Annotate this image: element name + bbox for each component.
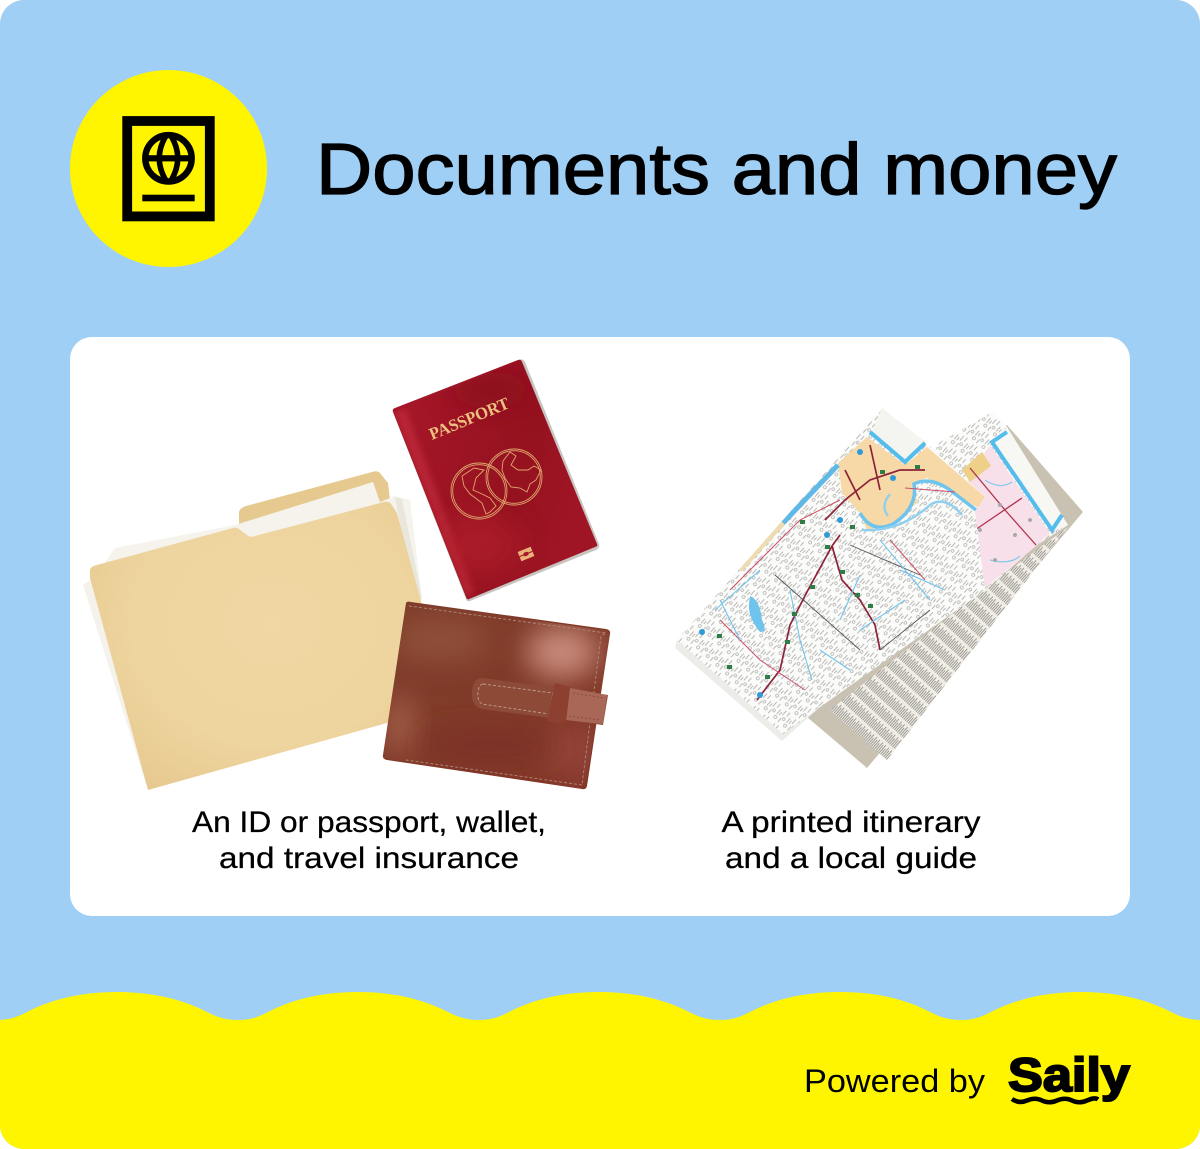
caption: left line two: and travel insurance	[219, 842, 519, 875]
title: Documents and money	[316, 129, 1118, 210]
map orange region	[838, 437, 985, 530]
upper left edge stripe	[783, 465, 838, 523]
caption: right: A printed itinerary	[722, 806, 980, 839]
caption: left: An ID or passport, wallet,	[192, 806, 546, 839]
icon: passport in yellow circle	[70, 70, 267, 267]
map backing board	[807, 425, 1083, 768]
wallet strap	[472, 678, 608, 725]
printed index page	[830, 527, 1068, 760]
powered by label: Powered by	[804, 1063, 986, 1099]
lake	[749, 596, 765, 632]
image: red passport	[393, 359, 599, 601]
map front sheet	[675, 408, 985, 741]
yellow wavy footer band	[0, 992, 1200, 1149]
logo: Saily: Saily	[1008, 1048, 1130, 1101]
passport label: PASSPORT	[426, 393, 513, 444]
panel: items card	[70, 337, 1130, 916]
caption: right line two: and a local guide	[725, 842, 977, 875]
map right sheet	[820, 412, 1068, 707]
blue interstate marks	[699, 449, 896, 698]
map white inset	[872, 408, 925, 463]
image: folded road map	[675, 408, 1083, 768]
passport globes emblem	[451, 449, 542, 519]
passport chip symbol	[518, 547, 534, 561]
river	[860, 481, 976, 527]
image: brown leather wallet	[383, 602, 610, 789]
green highway shields	[717, 465, 920, 679]
highways	[757, 546, 880, 700]
image: folder with papers	[83, 471, 422, 790]
